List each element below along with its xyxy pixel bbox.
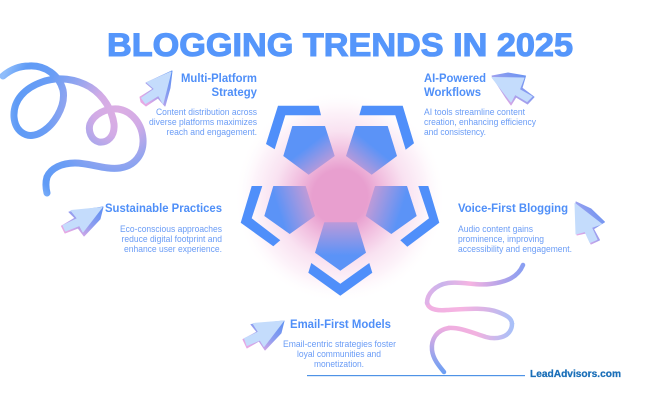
pentagon diagram (241, 106, 439, 296)
body text (149, 107, 257, 137)
bracket: bottom (308, 263, 372, 296)
body text (424, 107, 536, 137)
panel: ai-powered workflows (424, 71, 536, 137)
body text: prominence, improving (458, 234, 544, 244)
bracket: right (400, 186, 439, 247)
bracket: top left (266, 106, 321, 149)
icon: cursor arrow, sustainable practices (62, 207, 103, 236)
body text: reach and engagement. (166, 127, 257, 137)
body text: creation, enhancing efficiency (424, 117, 536, 127)
body text: Email-centric strategies foster (283, 339, 396, 349)
body text (458, 224, 572, 254)
title: BLOGGING TRENDS IN 2025 (107, 27, 573, 63)
panel: voice-first blogging (458, 201, 572, 254)
panel: email-first models (283, 317, 396, 369)
panel: sustainable practices (105, 201, 222, 254)
panel: multi-platform strategy (149, 71, 257, 137)
body text: enhance user experience. (124, 244, 222, 254)
body text: monetization. (314, 359, 364, 369)
heading line 2: Workflows (424, 85, 481, 99)
heading line 2: Strategy (212, 85, 257, 99)
body text: Eco-conscious approaches (120, 224, 222, 234)
heading: Multi-Platform (181, 71, 257, 85)
body text: Audio content gains (458, 224, 533, 234)
body text (283, 339, 396, 369)
body text (120, 224, 222, 254)
body text: AI tools streamline content (424, 107, 525, 117)
body text: and consistency. (424, 127, 486, 137)
icon: cursor arrow, voice-first (575, 202, 604, 244)
pentagon: top left (283, 126, 335, 175)
central pink glow (234, 91, 446, 303)
body text: Content distribution across (156, 107, 257, 117)
icon: cursor arrow, ai-powered (492, 73, 534, 105)
bracket: top right (359, 106, 414, 150)
pentagon: left (264, 186, 315, 234)
heading: AI-Powered (424, 71, 486, 85)
bracket: left (241, 186, 280, 246)
body text: diverse platforms maximizes (149, 117, 257, 127)
body text: loyal communities and (297, 349, 381, 359)
icon: cursor arrow, multi-platform (140, 71, 172, 106)
icon: cursor arrow, email-first (243, 321, 284, 350)
footer rule (307, 375, 525, 376)
heading: Voice-First Blogging (458, 201, 568, 215)
heading: Email-First Models (290, 317, 391, 331)
pentagon: right (366, 186, 417, 234)
decorative squiggle: bottom right (427, 265, 523, 372)
pentagon: bottom (315, 222, 366, 271)
body text: accessibility and engagement. (458, 244, 572, 254)
decorative curl: top left (3, 66, 143, 193)
brand: LeadAdvisors.com: LeadAdvisors.com (530, 369, 621, 380)
body text: reduce digital footprint and (122, 234, 222, 244)
pentagon: top right (346, 126, 397, 175)
heading: Sustainable Practices (105, 201, 222, 215)
